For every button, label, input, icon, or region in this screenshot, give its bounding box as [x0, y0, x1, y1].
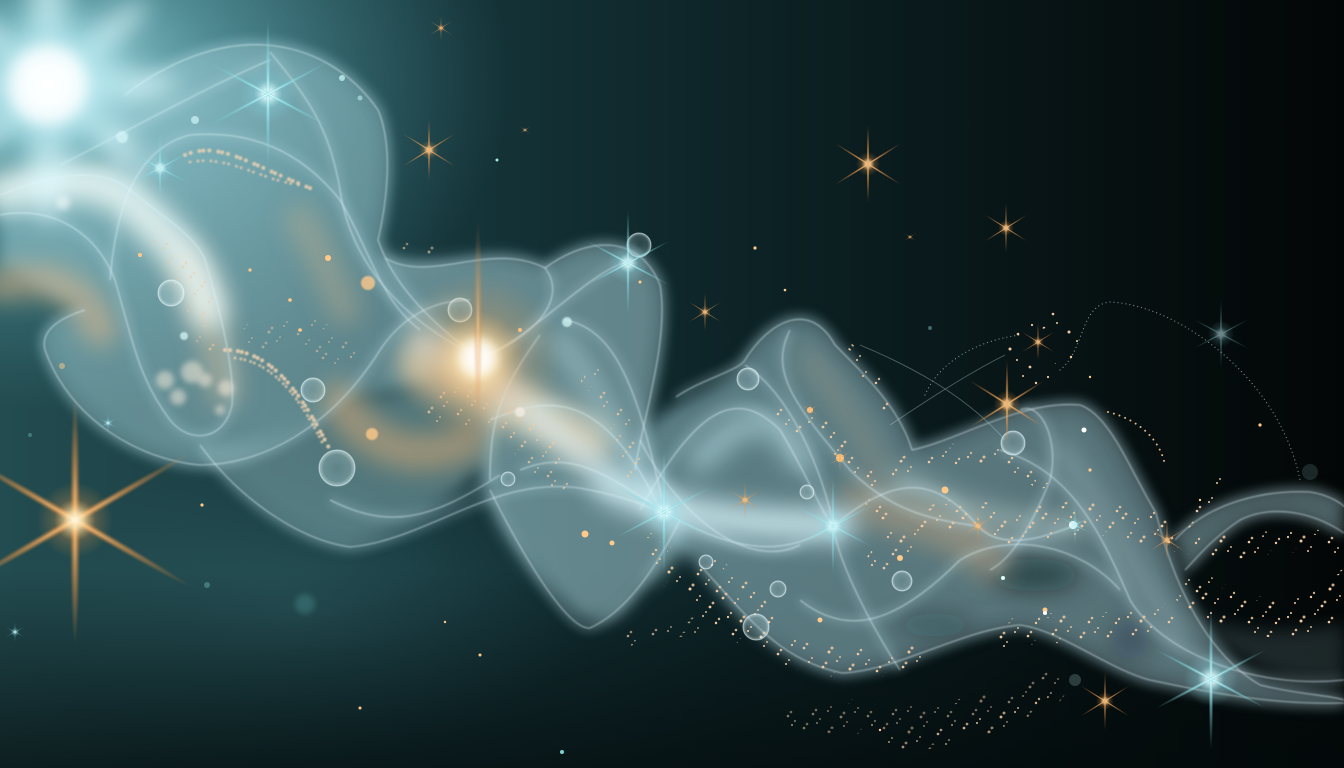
scattered warm sparks — [59, 246, 1262, 731]
top-left bright sun — [0, 0, 178, 225]
warm tint bands — [0, 220, 990, 560]
dark gaps between ribbon folds — [895, 559, 1150, 660]
speckled particle trails, second layer — [153, 241, 1344, 738]
speckled particle trails — [150, 245, 1344, 742]
bubbles — [158, 233, 1025, 640]
central golden burst — [393, 220, 563, 443]
large beaded trails — [185, 150, 330, 450]
thin thread — [860, 345, 1005, 440]
dotted arc upper right — [925, 302, 1300, 480]
bright silk bands — [0, 181, 1180, 640]
soft beads in left fold — [156, 361, 234, 415]
